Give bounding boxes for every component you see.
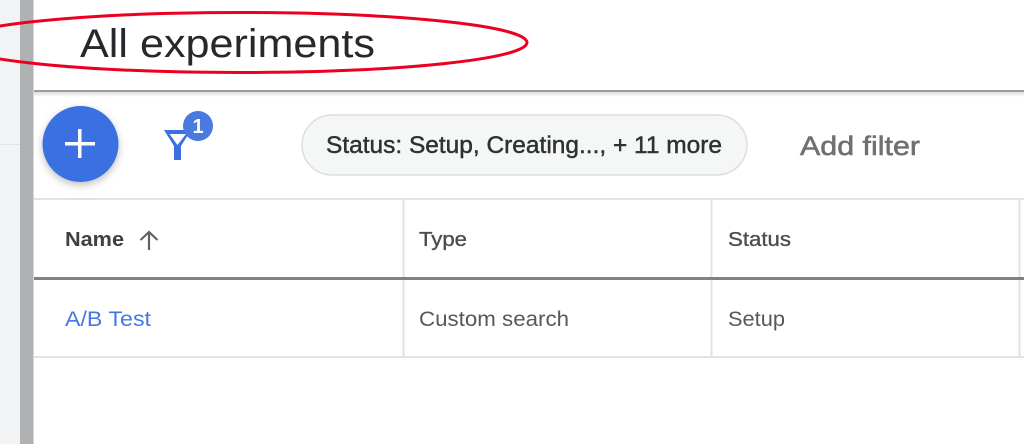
sidebar bbox=[0, 0, 34, 444]
row: name link: A/B Test bbox=[65, 308, 151, 331]
filter icon with badge: 1 bbox=[192, 116, 204, 138]
add button bbox=[42, 106, 118, 182]
row: type: Custom search bbox=[419, 308, 569, 331]
sort arrow bbox=[140, 232, 158, 250]
column header: type: Type bbox=[419, 228, 467, 251]
status filter chip: Status: Setup, Creating..., + 11 more bbox=[326, 132, 722, 159]
table grid bbox=[34, 198, 1024, 358]
add filter: Add filter bbox=[800, 131, 920, 161]
filter icon with badge bbox=[164, 111, 213, 160]
status filter chip bbox=[302, 115, 747, 175]
title: All experiments bbox=[80, 22, 375, 66]
column header: name bbox=[65, 228, 158, 251]
header divider bbox=[34, 90, 1024, 97]
column header: name: Name bbox=[65, 228, 124, 251]
column header: status: Status bbox=[728, 228, 791, 251]
red ellipse annotation bbox=[0, 12, 527, 72]
row: status: Setup bbox=[728, 308, 785, 331]
